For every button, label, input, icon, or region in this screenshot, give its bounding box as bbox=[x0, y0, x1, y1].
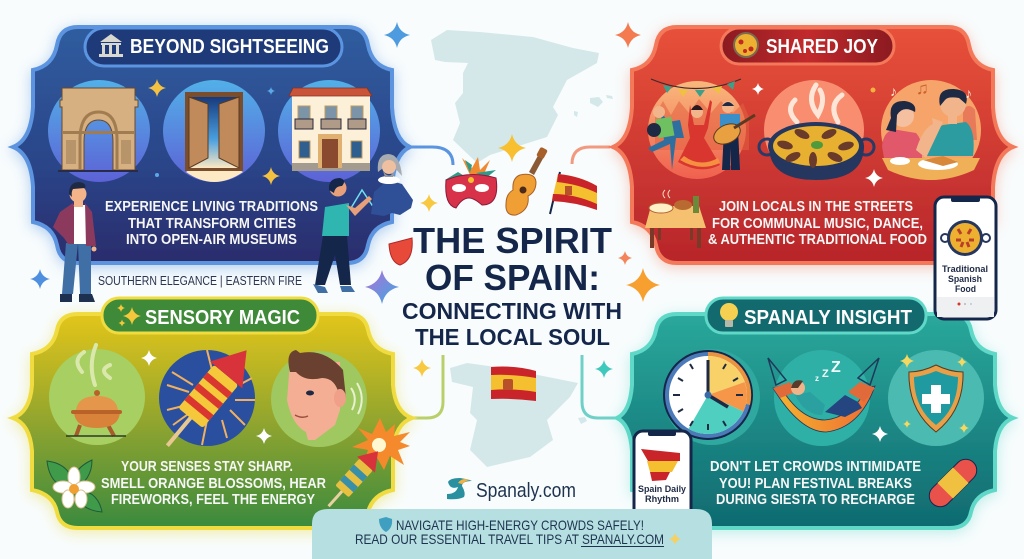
icon: museum bbox=[99, 34, 123, 57]
icon: theatre mask bbox=[389, 238, 412, 265]
connector: green bbox=[405, 355, 443, 418]
plaque: blue bbox=[13, 27, 410, 263]
header pill: blue bbox=[85, 28, 342, 66]
footer line two: READ OUR ESSENTIAL TRAVEL TIPS AT SPANALY.COM bbox=[355, 531, 664, 547]
image circle: firework rocket bbox=[151, 337, 263, 459]
body text: teal bbox=[710, 458, 921, 508]
phone: Traditional Spanish Food bbox=[935, 197, 996, 319]
icon: sparkles bbox=[117, 304, 141, 326]
sparkle: footer bbox=[669, 533, 681, 545]
phone: Spain Daily Rhythm bbox=[634, 431, 691, 531]
icon: music notes: ♫ bbox=[916, 79, 929, 98]
phone map: Spain flag colours bbox=[641, 449, 680, 481]
text: sleeping z: Z bbox=[831, 359, 841, 376]
phone caption bbox=[942, 264, 988, 295]
callout footer bbox=[312, 509, 712, 559]
body text: blue: THAT TRANSFORM CITIES bbox=[128, 215, 296, 232]
body text: blue: INTO OPEN-AIR MUSEUMS bbox=[126, 231, 297, 248]
map: Spain upper silhouette bbox=[431, 30, 613, 163]
phone caption bbox=[638, 484, 687, 505]
text: sleeping z: z bbox=[815, 374, 819, 383]
phone caption: Traditional bbox=[942, 264, 988, 275]
title: CONNECTING WITH bbox=[402, 298, 622, 324]
icon: carnival mask bbox=[445, 157, 497, 208]
pager dots bbox=[958, 302, 972, 306]
image circle: couple eating bbox=[881, 80, 981, 180]
icon: music notes: ♪ bbox=[965, 85, 972, 101]
connector: blue bbox=[405, 147, 453, 165]
panel: Sensory Magic bbox=[13, 298, 412, 528]
plaque: teal bbox=[617, 314, 1013, 528]
panel: Shared Joy bbox=[613, 27, 1013, 263]
sparkles: blue panel bbox=[148, 79, 280, 185]
icon: Spanish flag small bbox=[550, 172, 597, 214]
icon: guitar bbox=[506, 147, 548, 215]
sparkles: red panel bbox=[752, 83, 883, 187]
panel: Spanaly Insight bbox=[617, 298, 1013, 528]
link underline bbox=[581, 546, 664, 547]
icon: paella small bbox=[734, 33, 758, 57]
sparkle: teal panel bbox=[872, 426, 888, 442]
body text: red bbox=[708, 198, 927, 248]
image circle: open door bbox=[163, 80, 265, 182]
title bbox=[402, 220, 622, 350]
title: THE SPIRIT bbox=[413, 220, 612, 261]
heading: Sensory Magic: SENSORY MAGIC bbox=[145, 307, 300, 329]
header pill: red bbox=[721, 28, 894, 64]
caption: regions: SOUTHERN ELEGANCE | EASTERN FIRE bbox=[98, 274, 302, 288]
body text: green: YOUR SENSES STAY SHARP. bbox=[121, 458, 293, 475]
header pill: green bbox=[102, 298, 318, 333]
heading: Shared Joy: SHARED JOY bbox=[766, 36, 879, 58]
figure: traveller right bbox=[313, 178, 372, 293]
figure: traveller left bbox=[53, 182, 96, 302]
text: sleeping z: Z bbox=[822, 368, 829, 380]
image circle: arch bbox=[48, 80, 150, 182]
icon: bandage bbox=[925, 455, 981, 511]
icon: small rocket with burst bbox=[320, 418, 410, 514]
plaque: green bbox=[13, 314, 412, 528]
body text: green: SMELL ORANGE BLOSSOMS, HEAR bbox=[101, 475, 326, 492]
sparkles: around title bbox=[30, 22, 660, 378]
image circle: siesta clock bbox=[663, 349, 760, 445]
phone caption: Food bbox=[955, 284, 976, 295]
logo: Spanaly.com: Spanaly.com bbox=[476, 480, 576, 502]
image circle: festival dancers bbox=[647, 79, 755, 179]
sparkles: green panel bbox=[141, 350, 272, 444]
icon: shield bbox=[379, 517, 392, 532]
header pill: teal bbox=[706, 298, 926, 333]
panel: Beyond Sightseeing bbox=[13, 27, 410, 263]
phone caption: Spain Daily bbox=[638, 484, 687, 495]
phone icon: paella bbox=[941, 220, 990, 256]
image circle: paella bbox=[759, 80, 874, 180]
body text: red: & AUTHENTIC TRADITIONAL FOOD bbox=[708, 231, 927, 248]
body text: blue: EXPERIENCE LIVING TRADITIONS bbox=[105, 198, 318, 215]
title: OF SPAIN: bbox=[425, 257, 600, 298]
map: Spain lower silhouette bbox=[450, 363, 587, 467]
title: THE LOCAL SOUL bbox=[415, 324, 610, 350]
heading: Beyond Sightseeing: BEYOND SIGHTSEEING bbox=[130, 36, 329, 58]
body text: teal: DON'T LET CROWDS INTIMIDATE bbox=[710, 458, 921, 475]
plaque: red bbox=[613, 27, 1013, 263]
connector: teal bbox=[582, 355, 620, 418]
phone caption: Rhythm bbox=[645, 494, 679, 505]
body text: red: FOR COMMUNAL MUSIC, DANCE, bbox=[712, 215, 923, 232]
footer line one: NAVIGATE HIGH-ENERGY CROWDS SAFELY! bbox=[396, 517, 644, 533]
connector: red bbox=[572, 147, 610, 164]
phone caption: Spanish bbox=[948, 274, 982, 285]
heading: Spanaly Insight: SPANALY INSIGHT bbox=[744, 307, 912, 329]
text: sleeping z bbox=[815, 359, 841, 383]
icon: music notes bbox=[890, 79, 972, 101]
body text: green bbox=[101, 458, 326, 508]
body text: teal: YOU! PLAN FESTIVAL BREAKS bbox=[719, 475, 912, 492]
image circle: face listening bbox=[271, 350, 367, 447]
body text: blue bbox=[105, 198, 318, 248]
body text: teal: DURING SIESTA TO RECHARGE bbox=[716, 491, 915, 508]
icon: Spanish flag centre bbox=[491, 366, 536, 401]
body text: red: JOIN LOCALS IN THE STREETS bbox=[719, 198, 913, 215]
icon: light bulb bbox=[720, 303, 738, 327]
logo: Spanaly.com bbox=[447, 478, 576, 502]
image circle: incense pot bbox=[49, 345, 145, 445]
icon: music notes: ♪ bbox=[890, 83, 897, 99]
body text: green: FIREWORKS, FEEL THE ENERGY bbox=[111, 491, 315, 508]
icon: orange blossom bbox=[47, 460, 102, 512]
figure: historic thinker bbox=[351, 154, 413, 216]
image circle: hammock bbox=[768, 350, 879, 446]
icon: table with food bbox=[645, 190, 706, 248]
image circle: safety shield bbox=[888, 350, 984, 446]
image circle: Spanish house bbox=[278, 80, 380, 182]
